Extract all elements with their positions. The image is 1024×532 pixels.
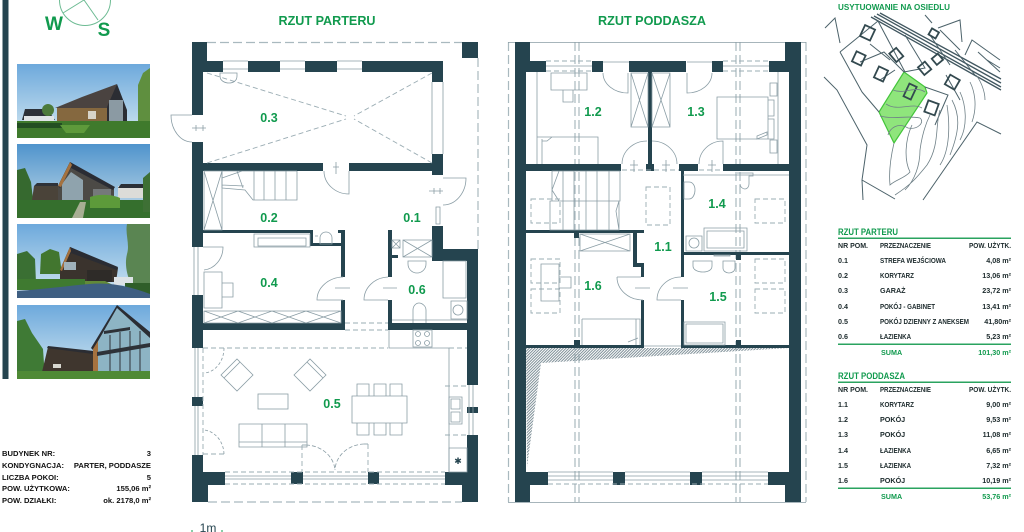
sofa <box>239 424 307 447</box>
fridge <box>449 448 467 472</box>
terrace doors <box>302 444 368 472</box>
table: ground floor rooms: 0.4 <box>838 302 848 311</box>
utility <box>392 240 432 257</box>
stairs attic <box>550 171 620 230</box>
building info: POW. UŻYTKOWA: <box>2 484 70 493</box>
plot boundaries <box>824 15 1001 200</box>
photo: house view 4 <box>17 305 150 379</box>
compass: W <box>45 14 63 35</box>
table: ground floor rooms: POKÓJ DZIENNY Z ANEKSEM <box>880 317 969 326</box>
table: attic rooms: 6,65 m² <box>986 446 1012 455</box>
coffee table <box>258 394 288 409</box>
table: attic rooms <box>838 371 1012 501</box>
armchairs <box>221 359 326 391</box>
table: ground floor rooms: 23,72 m² <box>982 286 1012 295</box>
highlighted plot <box>879 72 927 143</box>
room numbers: ground floor <box>260 111 426 411</box>
building info: LICZBA POKOI: <box>2 473 59 482</box>
table: attic rooms: 53,76 m² <box>982 492 1012 501</box>
room 1.3 furniture <box>717 72 778 164</box>
garage door left <box>171 115 206 142</box>
entrance door <box>429 178 466 224</box>
table: ground floor rooms: 0.1 <box>838 256 848 265</box>
garage ceiling diagonals <box>207 73 432 163</box>
title: ground floor: RZUT PARTERU <box>278 13 376 28</box>
compass <box>45 0 110 41</box>
bedroom doors <box>622 141 723 172</box>
kitchen <box>203 330 467 472</box>
table: ground floor rooms: GARAŻ <box>880 286 906 295</box>
table: attic rooms: 7,32 m² <box>986 461 1012 470</box>
building info: 3 <box>147 449 151 458</box>
table: attic rooms: 11,08 m² <box>983 430 1012 439</box>
bathroom 1.5 fixtures <box>684 255 735 345</box>
room 1.6 furniture <box>541 234 640 345</box>
table: ground floor rooms <box>838 227 1012 357</box>
walls: ground floor <box>192 42 478 502</box>
table: attic rooms: 1.1 <box>838 400 848 409</box>
table: ground floor rooms: 13,41 m² <box>982 302 1012 311</box>
table: attic rooms: 1.6 <box>838 476 848 485</box>
table: ground floor rooms: 0.6 <box>838 332 848 341</box>
table: ground floor rooms: 5,23 m² <box>986 332 1012 341</box>
doors 0.4 / 0.6 <box>317 277 397 300</box>
room numbers: attic: 1.3 <box>687 105 705 119</box>
table: attic rooms: 10,19 m² <box>982 476 1012 485</box>
room numbers: ground floor: 0.5 <box>323 397 341 411</box>
table: attic rooms: PRZEZNACZENIE <box>880 385 931 394</box>
building info <box>2 449 152 505</box>
table: ground floor rooms: 4,08 m² <box>986 256 1012 265</box>
room numbers: attic: 1.4 <box>708 197 726 211</box>
room numbers: attic <box>584 105 727 304</box>
table: ground floor rooms: 41,80m² <box>984 317 1012 326</box>
table: attic rooms: SUMA <box>881 492 902 501</box>
floor plan: ground floor <box>171 42 478 502</box>
building info: BUDYNEK NR: <box>2 449 55 458</box>
compass: S <box>98 20 110 41</box>
table: attic rooms: NR POM. <box>838 385 868 394</box>
south windows attic <box>548 472 768 484</box>
houses <box>852 25 960 115</box>
room 0.4 furniture <box>204 234 341 323</box>
left accent bar <box>2 0 8 379</box>
building info: 155,06 m² <box>116 484 151 493</box>
terrain contours <box>880 75 985 195</box>
table: ground floor rooms: 0.5 <box>838 317 848 326</box>
site map title: USYTUOWANIE NA OSIEDLU <box>838 2 950 12</box>
table: attic rooms: KORYTARZ <box>880 400 915 409</box>
table: ground floor rooms: 101,30 m² <box>978 348 1012 357</box>
building info: PARTER, PODDASZE <box>74 461 151 470</box>
room numbers: attic: 1.6 <box>584 279 602 293</box>
table: attic rooms: 9,00 m² <box>986 400 1012 409</box>
bathroom fixtures <box>392 261 467 323</box>
doors 1.5 / 1.6 <box>617 277 688 300</box>
table: ground floor rooms: NR POM. <box>838 241 868 250</box>
walls: attic <box>515 42 801 502</box>
room numbers: ground floor: 0.6 <box>408 283 426 297</box>
table: ground floor rooms: ŁAZIENKA <box>880 332 911 341</box>
table: attic rooms: 1.3 <box>838 430 848 439</box>
floor plan: attic <box>508 42 806 502</box>
windows: attic <box>546 61 769 346</box>
table: attic rooms: POW. UŻYTK. <box>969 385 1011 394</box>
room numbers: attic: 1.2 <box>584 105 602 119</box>
table: attic rooms: 1.2 <box>838 415 848 424</box>
room 1.2 furniture <box>537 72 598 164</box>
skylights <box>531 187 785 313</box>
table: ground floor rooms: STREFA WEJŚCIOWA <box>880 256 946 265</box>
hatched low ceiling <box>526 348 789 467</box>
table: attic rooms: ŁAZIENKA <box>880 446 911 455</box>
table: attic rooms: POKÓJ <box>880 415 905 424</box>
table: ground floor rooms: KORYTARZ <box>880 271 915 280</box>
fridge: ✱ <box>454 456 462 466</box>
bathroom 1.4 fixtures <box>683 173 789 251</box>
wardrobes <box>631 73 670 127</box>
washbasin niche <box>315 232 332 244</box>
photo: house view 3 <box>17 224 150 298</box>
title: attic floor: RZUT PODDASZA <box>598 13 707 28</box>
balcony doors <box>603 73 712 93</box>
room numbers: attic: 1.5 <box>709 290 727 304</box>
building info: KONDYGNACJA: <box>2 461 64 470</box>
room numbers: ground floor: 0.1 <box>403 211 421 225</box>
west windows <box>195 348 227 455</box>
room numbers: ground floor: 0.4 <box>260 276 278 290</box>
photo: house view 1 <box>17 64 150 138</box>
south windows <box>225 472 445 484</box>
table: attic rooms: RZUT PODDASZA <box>838 371 906 381</box>
table: ground floor rooms: 0.3 <box>838 286 848 295</box>
photo: house view 2 <box>17 144 150 218</box>
room numbers: ground floor: 0.2 <box>260 211 278 225</box>
table: attic rooms: 1.4 <box>838 446 848 455</box>
stairs <box>222 171 297 200</box>
building info: POW. DZIAŁKI: <box>2 496 56 505</box>
table: ground floor rooms: 13,06 m² <box>982 271 1012 280</box>
east windows <box>445 385 473 435</box>
table: attic rooms: POKÓJ <box>880 430 905 439</box>
room numbers: attic: 1.1 <box>654 240 672 254</box>
building info: 5 <box>147 473 152 482</box>
kitchen sink <box>449 397 462 424</box>
closet hall <box>204 171 222 230</box>
table: attic rooms: 9,53 m² <box>986 415 1012 424</box>
table: ground floor rooms: RZUT PARTERU <box>838 227 898 237</box>
windows: garage <box>223 61 443 154</box>
site map <box>824 13 1001 200</box>
table: ground floor rooms: POW. UŻYTK. <box>969 241 1011 250</box>
room numbers: ground floor: 0.3 <box>260 111 278 125</box>
table: ground floor rooms: PRZEZNACZENIE <box>880 241 931 250</box>
road <box>871 13 1001 90</box>
table: attic rooms: 1.5 <box>838 461 848 470</box>
window 0.4 <box>194 247 223 295</box>
garage sink <box>220 73 237 83</box>
building info: ok. 2178,0 m² <box>103 496 151 505</box>
table: ground floor rooms: 0.2 <box>838 271 848 280</box>
roof outline dashed <box>508 42 806 502</box>
table: attic rooms: ŁAZIENKA <box>880 461 911 470</box>
door: garage to corridor <box>324 162 349 194</box>
table: attic rooms: POKÓJ <box>880 476 905 485</box>
corridor dashed <box>345 323 388 330</box>
dining set <box>352 384 407 435</box>
table: ground floor rooms: SUMA <box>881 348 902 357</box>
table: ground floor rooms: POKÓJ - GABINET <box>880 302 936 311</box>
scale bar <box>192 521 222 532</box>
